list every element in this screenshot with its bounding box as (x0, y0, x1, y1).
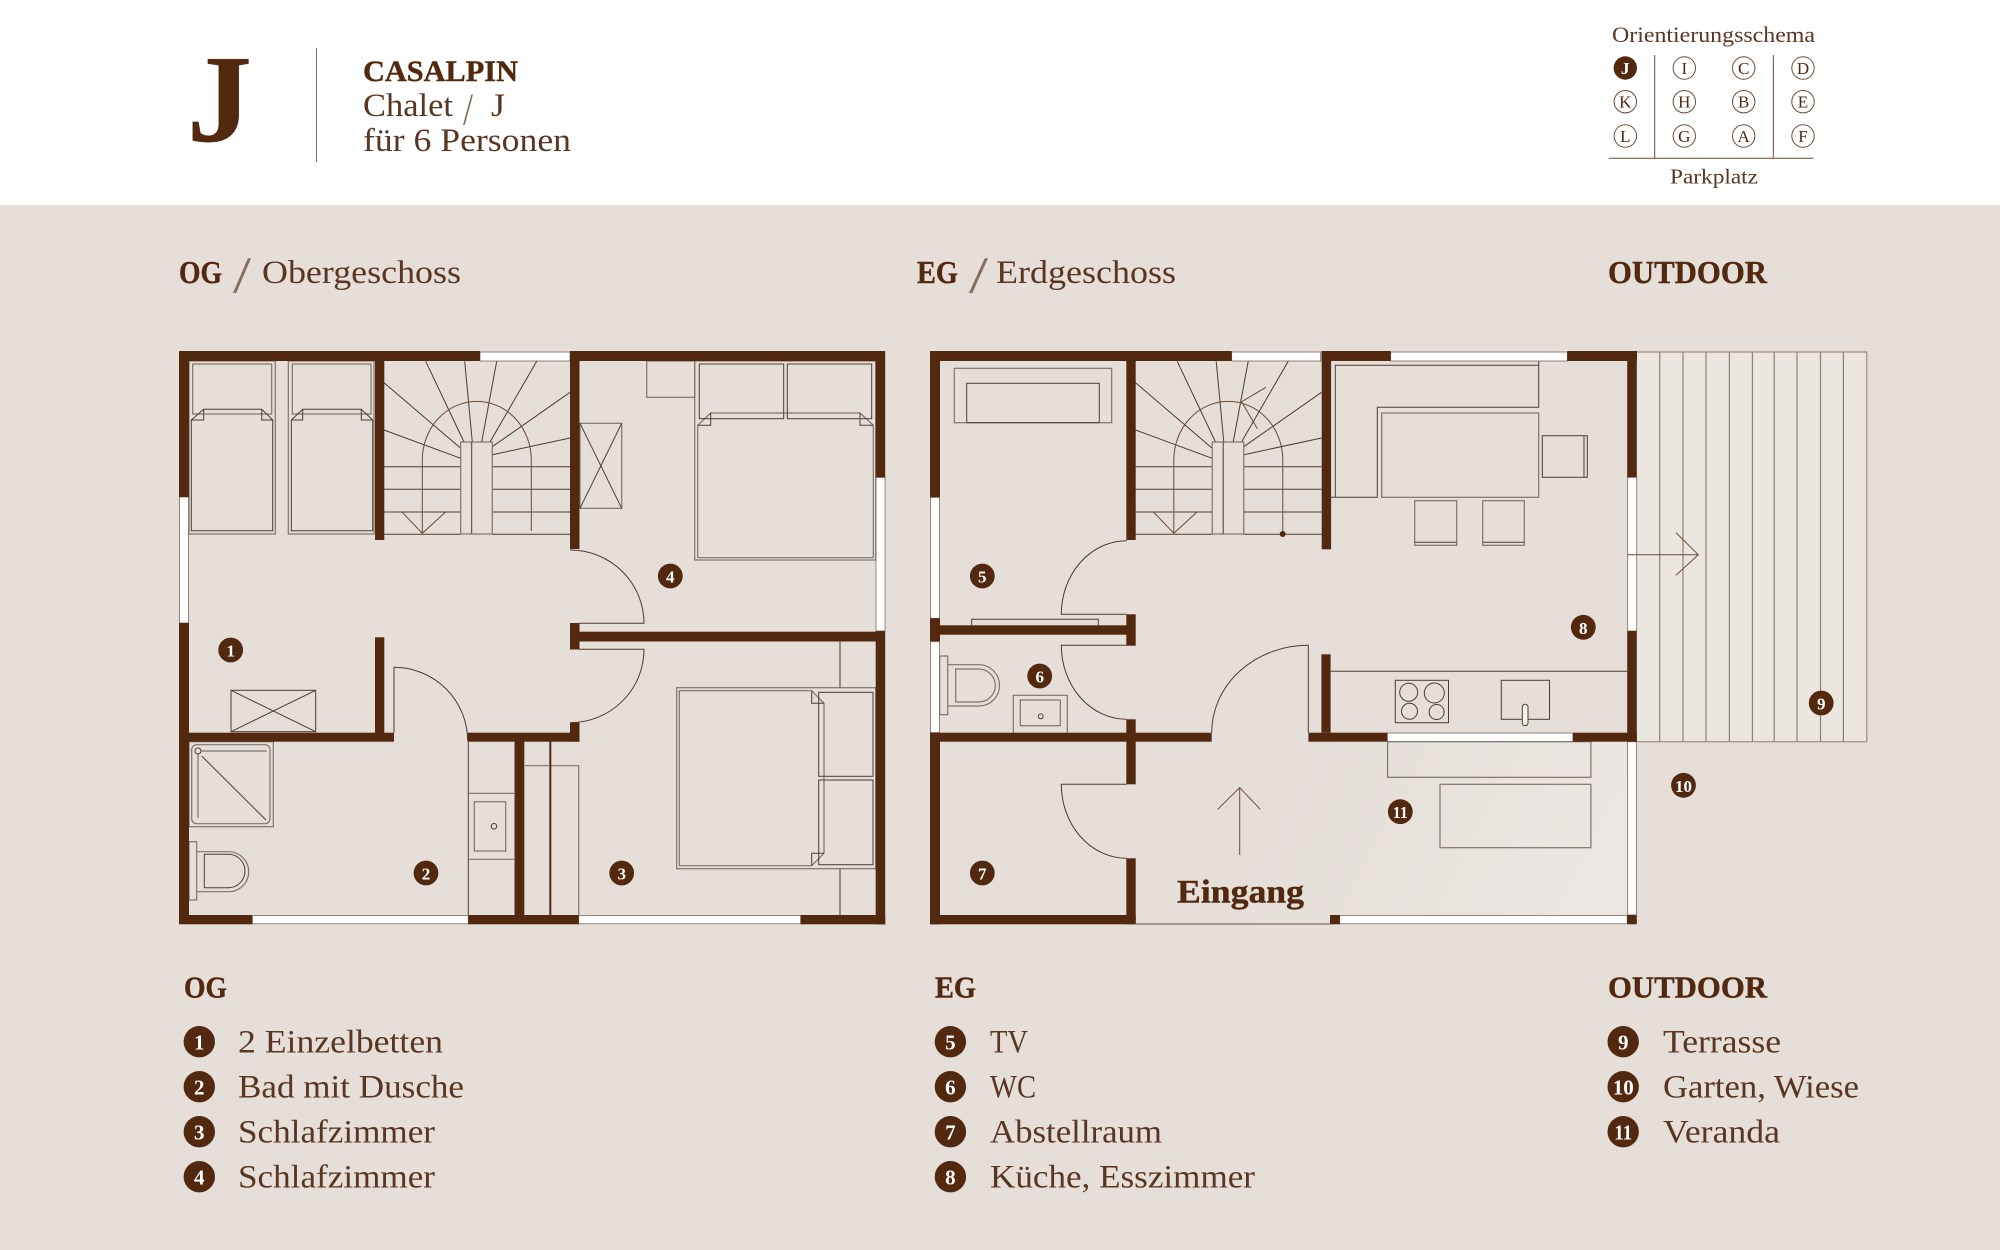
legend: EG: Abstellraum (990, 1115, 1162, 1151)
windows (180, 352, 885, 924)
orientation schema: D (1797, 59, 1809, 78)
legend: OUTDOOR: 11 (1614, 1120, 1632, 1144)
title text: für 6 Personen (363, 123, 571, 159)
heading: EG (917, 248, 1176, 304)
veranda (1136, 742, 1627, 924)
orientation schema: C (1738, 59, 1749, 78)
legend: EG: 7 (945, 1120, 956, 1144)
room badge 2 (414, 861, 438, 885)
room badge 8 (1571, 615, 1596, 640)
room badge 4: 4 (666, 568, 675, 586)
doors (1061, 541, 1308, 858)
room badge 11 (1388, 799, 1413, 824)
room badge 6: 6 (1035, 668, 1044, 686)
walls (930, 351, 1637, 924)
room badge 2: 2 (422, 864, 430, 884)
title text: Chalet (363, 88, 453, 124)
legend: OG: 1 (194, 1030, 205, 1054)
title text (363, 55, 571, 159)
arrow: terrace exit (1627, 533, 1698, 575)
orientation schema: G (1678, 127, 1690, 146)
title text: CASALPIN (363, 55, 518, 88)
orientation schema (1609, 22, 1815, 188)
room badge 9 (1809, 691, 1834, 715)
room badge 9: 9 (1817, 694, 1825, 714)
floor plan: EG (930, 351, 1834, 924)
legend: OG: Schlafzimmer (238, 1115, 435, 1151)
legend: OG: 2 Einzelbetten (238, 1025, 443, 1061)
orientation schema: I (1681, 59, 1687, 78)
windows (930, 352, 1637, 924)
legend: OG: OG (184, 970, 227, 1004)
orientation schema: J (1621, 59, 1630, 78)
orientation schema: E (1798, 93, 1808, 112)
room badge 10: 10 (1675, 777, 1692, 796)
legend: OG: Bad mit Dusche (238, 1070, 464, 1106)
orientation schema: A (1738, 127, 1751, 146)
orientation schema: K (1619, 93, 1632, 112)
wardrobes (231, 361, 695, 732)
legend: OUTDOOR: OUTDOOR (1608, 970, 1768, 1004)
heading: OG: / (233, 248, 252, 304)
legend: EG: 5 (945, 1030, 956, 1054)
title text: / (463, 84, 473, 134)
large letter J: J (187, 31, 252, 169)
heading: OG (179, 248, 461, 304)
room badge 3: 3 (617, 864, 626, 884)
single beds (189, 361, 374, 534)
double bed room 3 (677, 641, 876, 915)
room badge 3 (609, 861, 634, 885)
doors (394, 550, 644, 741)
legend: OG: 3 (194, 1120, 205, 1144)
orientation schema: Parkplatz (1670, 164, 1758, 188)
staircase (384, 361, 570, 534)
orientation schema: B (1738, 93, 1749, 112)
legend: EG: 6 (945, 1076, 956, 1100)
legend: EG: 8 (945, 1166, 956, 1190)
veranda furniture (1388, 742, 1591, 848)
legend: OUTDOOR: Terrasse (1663, 1025, 1781, 1061)
orientation schema: H (1678, 93, 1690, 112)
legend: OUTDOOR: 9 (1618, 1030, 1628, 1054)
room badge 4 (658, 564, 683, 588)
room badge 6 (1027, 664, 1052, 688)
heading: EG: EG (917, 254, 958, 290)
entrance label: Eingang (1177, 874, 1305, 910)
heading: OUTDOOR: OUTDOOR (1608, 254, 1768, 290)
orientation schema: F (1798, 127, 1808, 146)
floor plan: OG (179, 351, 885, 924)
heading: EG: Erdgeschoss (996, 255, 1176, 291)
legend: EG: Küche, Esszimmer (990, 1160, 1255, 1196)
legend: EG: EG (935, 970, 976, 1004)
legend: OUTDOOR (1608, 970, 1859, 1151)
legend: OUTDOOR: Garten, Wiese (1663, 1070, 1859, 1106)
legend: OG (184, 970, 464, 1196)
room badge 7 (970, 861, 995, 885)
double bed room 4 (695, 361, 876, 560)
staircase (1136, 361, 1322, 537)
legend: EG: TV (990, 1025, 1028, 1061)
arrow: entrance (1218, 788, 1260, 855)
heading: EG: / (969, 248, 989, 304)
legend: OUTDOOR: Veranda (1663, 1115, 1780, 1151)
walls (179, 351, 885, 924)
kitchen counter (1331, 671, 1627, 726)
TV unit (954, 368, 1112, 625)
room badge 1 (218, 638, 243, 662)
heading: OG: Obergeschoss (262, 255, 461, 291)
legend: OG: Schlafzimmer (238, 1160, 435, 1196)
title text: J (491, 88, 505, 124)
terrace (1637, 352, 1867, 742)
dining area (1331, 361, 1587, 545)
legend: OUTDOOR: 10 (1613, 1076, 1634, 1100)
bathroom fixtures (189, 741, 579, 915)
legend: OG: 2 (194, 1076, 205, 1100)
legend: EG (935, 970, 1255, 1196)
room badge 11: 11 (1393, 803, 1408, 822)
room badge 5: 5 (978, 568, 987, 586)
room badge 10 (1671, 773, 1696, 798)
legend: EG: WC (990, 1070, 1036, 1106)
room badge 5 (970, 564, 995, 588)
WC fixtures (940, 656, 1067, 733)
header: chalet title (187, 31, 571, 169)
orientation schema: Orientierungsschema (1612, 22, 1815, 47)
room badge 1: 1 (226, 642, 235, 660)
room badge 8: 8 (1579, 619, 1588, 638)
heading: OG: OG (179, 254, 222, 290)
orientation schema: L (1620, 127, 1630, 146)
room badge 7: 7 (978, 864, 987, 884)
legend: OG: 4 (194, 1166, 205, 1190)
